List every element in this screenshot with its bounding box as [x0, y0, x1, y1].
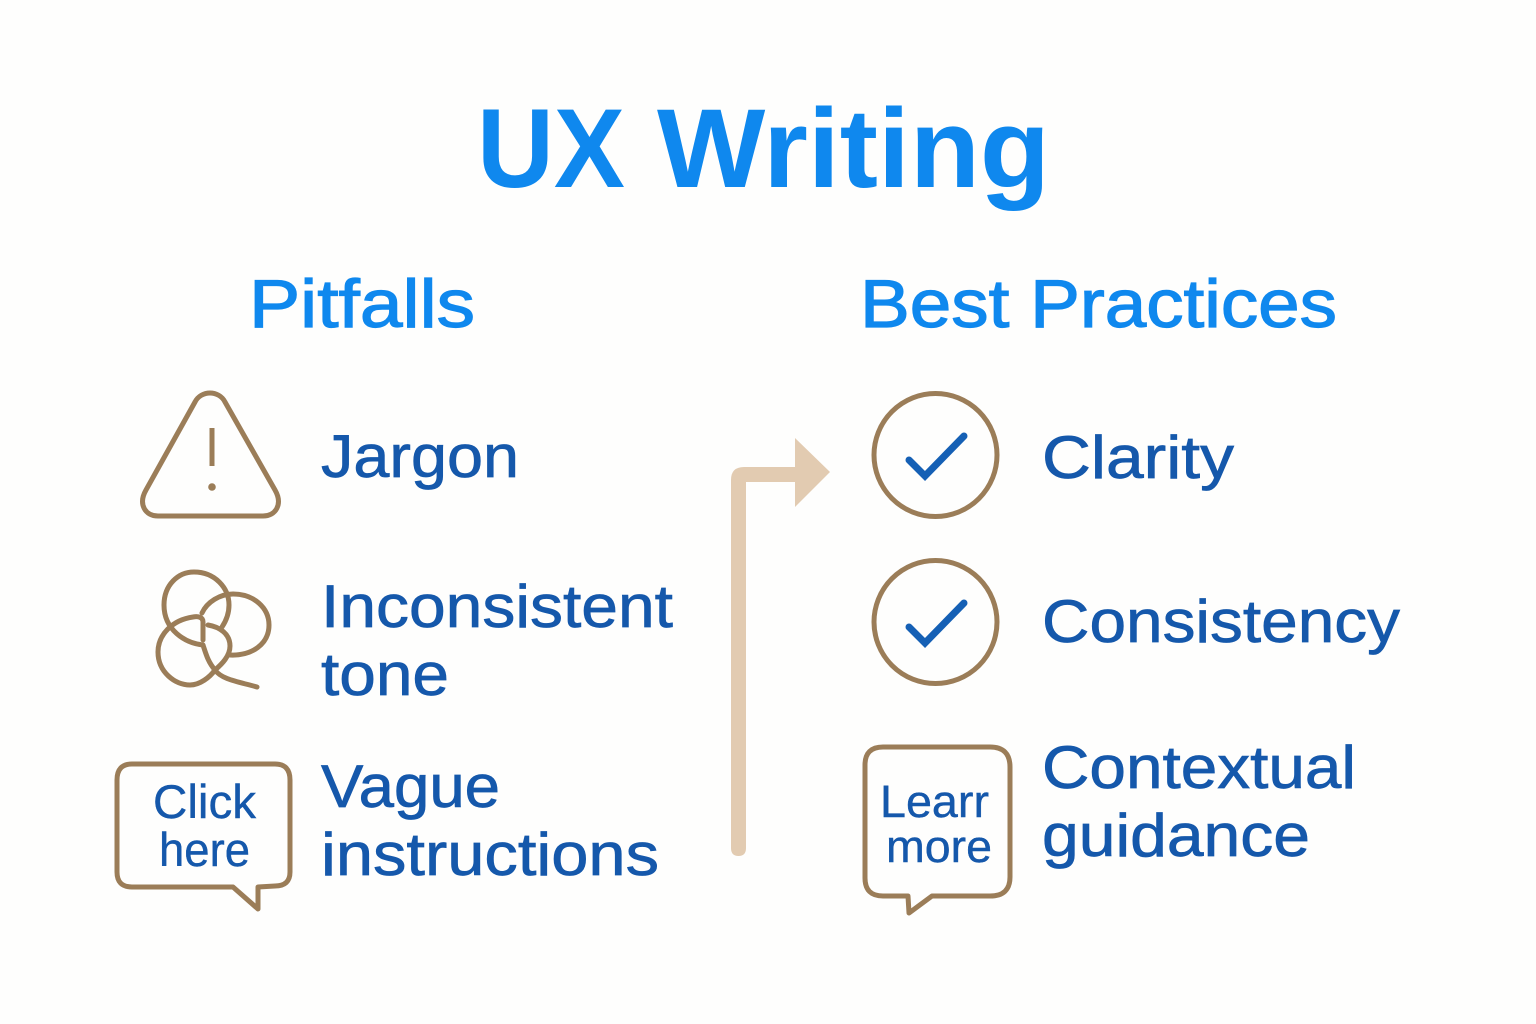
icon: learn more speech bubble [865, 747, 1010, 913]
icon: check circle clarity [874, 394, 997, 516]
text: contextual guidance: guidance [1042, 802, 1310, 869]
heading: pitfalls: Pitfalls [249, 266, 475, 342]
arrow: pitfalls to best practices [731, 438, 830, 856]
text: inconsistent tone: Inconsistent [321, 573, 673, 640]
text: inconsistent tone [321, 573, 673, 708]
icon: warning triangle [143, 393, 278, 516]
text: contextual guidance: Contextual [1042, 734, 1356, 801]
icon: learn more speech bubble: Learr [880, 776, 989, 827]
heading: best practices: Best Practices [860, 266, 1337, 342]
icon: click here speech bubble: Click [153, 775, 257, 828]
text: contextual guidance [1042, 734, 1356, 869]
icon: tangled knot [158, 572, 269, 687]
text: vague instructions: Vague [321, 753, 500, 820]
text: vague instructions [321, 753, 659, 888]
title: Writing [657, 86, 1050, 211]
icon: click here speech bubble: here [159, 823, 250, 876]
text: inconsistent tone: tone [321, 641, 449, 708]
title: UX [477, 86, 625, 211]
icon: check circle consistency [874, 560, 997, 684]
text: clarity: Clarity [1042, 424, 1234, 491]
text: jargon: Jargon [321, 423, 519, 490]
icon: learn more speech bubble: more [886, 821, 992, 872]
text: consistency: Consistency [1042, 588, 1400, 655]
text: vague instructions: instructions [321, 821, 659, 888]
title [477, 86, 1050, 211]
icon: click here speech bubble [117, 764, 290, 909]
